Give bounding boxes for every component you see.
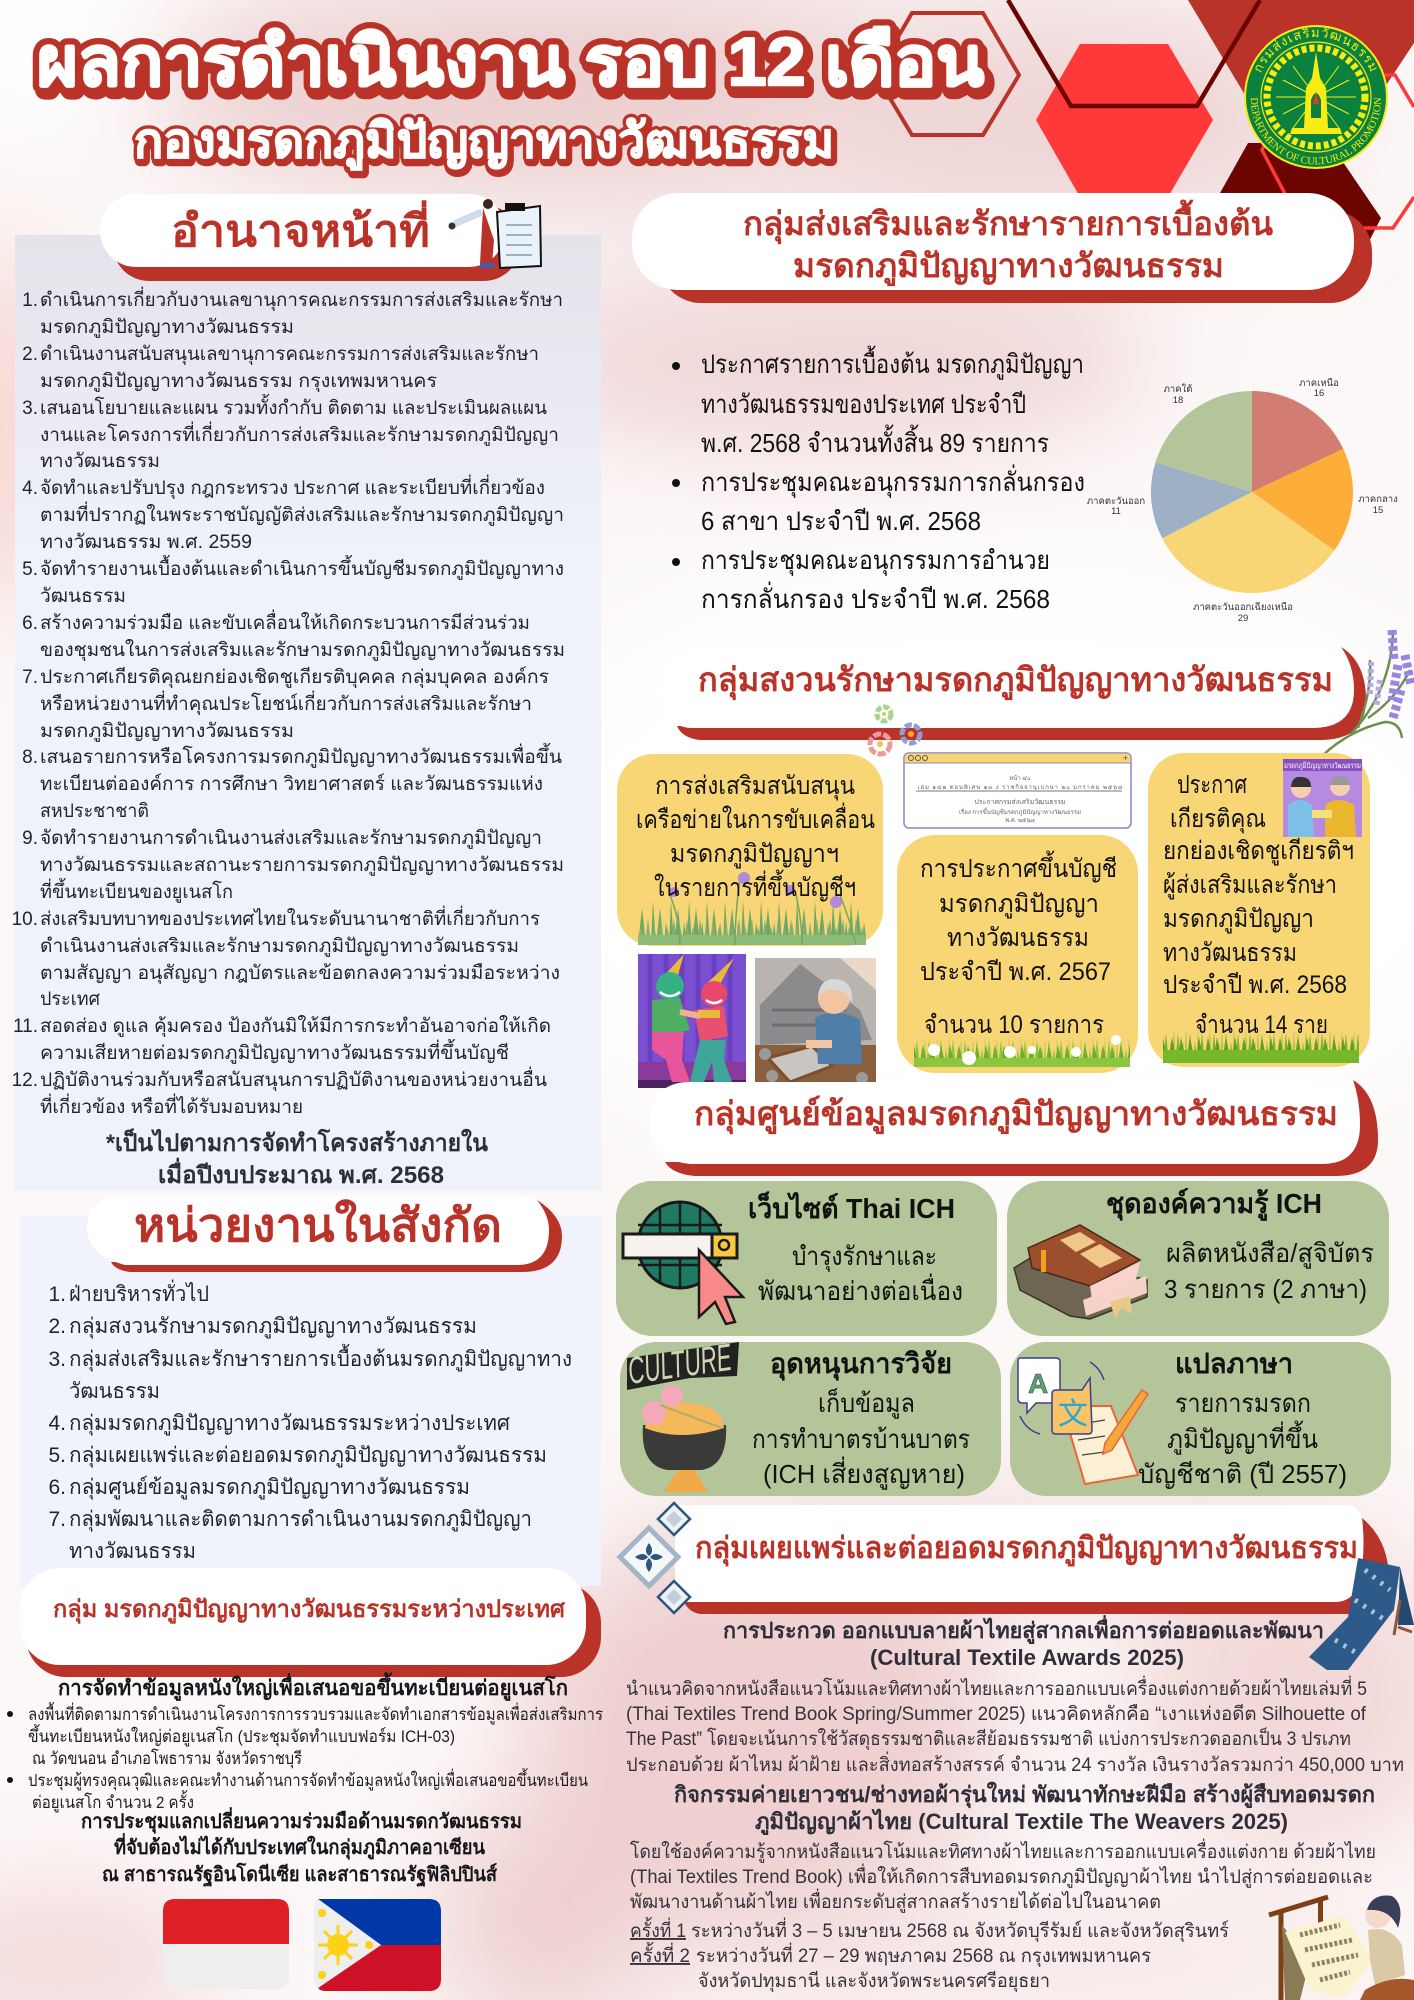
heading: units <box>87 1196 562 1272</box>
pie chart by region: ภาคตะวันออกเฉียงเหนือ <box>1193 601 1293 613</box>
card: Thai ICH website: บำรุงรักษาและ <box>792 1241 937 1272</box>
bullet list: ทางวัฒนธรรมของประเทศ ประจำปี <box>701 389 1026 419</box>
weavers camp text: ระหว่างวันที่ 27 – 29 พฤษภาคม 2568 ณ กรุงเทพมหานคร <box>696 1942 1151 1968</box>
pie chart by region: ภาคใต้ <box>1164 383 1192 395</box>
duties list: ส่งเสริมบทบาทของประเทศไทยในระดับนานาชาติที่เกี่ยวกับการ <box>40 905 540 930</box>
pie chart by region: ภาคกลาง <box>1358 494 1398 505</box>
card: network support: ในรายการที่ขึ้นบัญชีฯ <box>654 869 856 902</box>
card: inventory announcement <box>897 835 1138 1073</box>
card: research support: อุดหนุนการวิจัย <box>770 1348 952 1381</box>
weavers camp text: กิจกรรมค่ายเยาวชน/ช่างทอผ้ารุ่นใหม่ พัฒนาทักษะฝีมือ สร้างผู้สืบทอดมรดก <box>674 1781 1375 1809</box>
pie chart by region: 16 <box>1314 388 1324 399</box>
bullet list: พ.ศ. 2568 จำนวนทั้งสิ้น 89 รายการ <box>701 424 1049 458</box>
card: research support: (ICH เสี่ยงสูญหาย) <box>763 1456 965 1490</box>
bullet list: การประชุมคณะอนุกรรมการกลั่นกรอง <box>701 464 1085 498</box>
weavers camp text: จังหวัดปทุมธานี และจังหวัดพระนครศรีอยุธยา <box>698 1970 1050 1993</box>
duties list: ตามสัญญา อนุสัญญา กฎบัตรและข้อตกลงความร่วมมือระหว่าง <box>40 963 560 985</box>
units list: ทางวัฒนธรรม <box>69 1540 196 1563</box>
image: gazette document window: + <box>1123 753 1128 763</box>
panel: international group <box>7 1568 603 1991</box>
units list: 1. <box>48 1283 66 1306</box>
units list: กลุ่มศูนย์ข้อมูลมรดกภูมิปัญญาทางวัฒนธรรม <box>69 1475 470 1500</box>
subtitle: กองมรดกภูมิปัญญาทางวัฒนธรรม <box>136 118 836 174</box>
duties list: มรดกภูมิปัญญาทางวัฒนธรรม <box>40 721 294 742</box>
duties list: 2. <box>22 344 38 365</box>
card: honouring persons: มรดกภูมิปัญญา <box>1163 905 1314 934</box>
units list: วัฒนธรรม <box>69 1380 160 1403</box>
card: ICH knowledge set: 3 รายการ (2 ภาษา) <box>1164 1274 1367 1304</box>
image: silversmith artisan <box>755 958 876 1084</box>
title: ผลการดำเนินงาน รอบ 12 เดือน <box>40 29 987 105</box>
units list: 2. <box>48 1315 66 1338</box>
card: translation: ภูมิปัญญาที่ขึ้น <box>1167 1420 1318 1455</box>
icon: weaver woman <box>1269 1896 1414 2000</box>
weavers camp text: โดยใช้องค์ความรู้จากหนังสือแนวโน้มและทิศทางผ้าไทยและการออกแบบเครื่องแต่งกาย ด้วยผ้าไทย <box>630 1838 1376 1863</box>
heading: information centre <box>650 1080 1378 1176</box>
international activities text: ขึ้นทะเบียนหนังใหญ่ต่อยูเนสโก (ประชุมจัดทำแบบฟอร์ม ICH-03) <box>28 1724 455 1747</box>
duties list: ที่เกี่ยวข้อง หรือที่ได้รับมอบหมาย <box>40 1093 303 1118</box>
units list: กลุ่มสงวนรักษามรดกภูมิปัญญาทางวัฒนธรรม <box>69 1315 477 1339</box>
card: ICH knowledge set <box>1007 1181 1389 1336</box>
duties list: วัฒนธรรม <box>40 586 126 607</box>
icon: Philippines flag <box>314 1899 441 1991</box>
icon: flowers <box>870 707 920 754</box>
heading: dissemination: กลุ่มเผยแพร่และต่อยอดมรดกภูมิปัญญาทางวัฒนธรรม <box>695 1532 1358 1567</box>
card: honouring persons: จำนวน 14 ราย <box>1195 1011 1328 1039</box>
icon: culture banner <box>625 1337 739 1393</box>
logo: Department of Cultural Promotion seal: กรมส่งเสริมวัฒนธรรม <box>1256 28 1377 72</box>
duties list: ทางวัฒนธรรม พ.ศ. 2559 <box>40 532 252 553</box>
duties list: ทางวัฒนธรรมและสถานะรายการมรดกภูมิปัญญาทางวัฒนธรรม <box>40 855 564 876</box>
bullet list: 6 สาขา ประจำปี พ.ศ. 2568 <box>701 506 981 536</box>
card: network support: เครือข่ายในการขับเคลื่อน <box>636 802 875 834</box>
card: inventory announcement: ทางวัฒนธรรม <box>947 924 1089 952</box>
card: Thai ICH website <box>616 1181 997 1336</box>
textile awards text: The Past” โดยจะเน้นการใช้วัสดุธรรมชาติและสีย้อมธรรมชาติ แบ่งการประกวดออกเป็น 3 ปรเภท <box>626 1726 1351 1751</box>
units list: กลุ่มเผยแพร่และต่อยอดมรดกภูมิปัญญาทางวัฒนธรรม <box>69 1444 547 1468</box>
international activities text: ประชุมผู้ทรงคุณวุฒิและคณะทำงานด้านการจัดทำข้อมูลหนังใหญ่เพื่อเสนอขอขึ้นทะเบียน <box>28 1768 588 1791</box>
international activities text: การประชุมแลกเปลี่ยนความร่วมมือด้านมรดกวัฒนธรรม <box>81 1806 522 1834</box>
image: gazette document window: ประกาศกรมส่งเสริมวัฒนธรรม <box>974 798 1066 806</box>
units list: 6. <box>48 1476 66 1499</box>
title: ผลการดำเนินงาน รอบ 12 เดือน <box>37 24 984 100</box>
duties list: ปฏิบัติงานร่วมกับหรือสนับสนุนการปฏิบัติงานของหน่วยงานอื่น <box>40 1066 547 1092</box>
card: translation: รายการมรดก <box>1175 1388 1311 1418</box>
image: gazette document window: พ.ศ. ๒๕๖๗ <box>1005 817 1035 824</box>
note: เมื่อปีงบประมาณ พ.ศ. 2568 <box>158 1157 444 1189</box>
decorative hexagons top right <box>876 0 1414 255</box>
heading: dissemination <box>675 1505 1389 1614</box>
international activities text: ลงพื้นที่ติดตามการดำเนินงานโครงการการรวบรวมและจัดทำเอกสารข้อมูลเพื่อส่งเสริมการ <box>28 1702 603 1725</box>
heading: safeguarding: กลุ่มสงวนรักษามรดกภูมิปัญญาทางวัฒนธรรม <box>698 661 1333 701</box>
duties list: 4. <box>22 478 38 499</box>
duties list: ทางวัฒนธรรม <box>40 451 160 472</box>
panel: safeguarding <box>617 630 1411 1088</box>
units list <box>48 1279 572 1563</box>
card: honouring persons: ทางวัฒนธรรม <box>1163 939 1297 967</box>
card: honouring persons: ผู้ส่งเสริมและรักษา <box>1163 871 1337 900</box>
duties list: 6. <box>22 613 38 634</box>
pie chart by region: ภาคตะวันออก <box>1087 496 1145 507</box>
panel: preliminary inventory <box>632 193 1398 624</box>
duties list: มรดกภูมิปัญญาทางวัฒนธรรม กรุงเทพมหานคร <box>40 371 437 393</box>
weavers camp text: (Thai Textiles Trend Book) เพื่อให้เกิดการสืบทอดมรดกภูมิปัญญาผ้าไทย นำไปสู่การต่อยอดและ <box>630 1863 1373 1888</box>
textile awards text <box>626 1614 1404 1776</box>
duties list: ประกาศเกียรติคุณยกย่องเชิดชูเกียรติบุคคล กลุ่มบุคคล องค์กร <box>40 666 549 689</box>
card: honouring persons: ยกย่องเชิดชูเกียรติฯ <box>1163 837 1354 866</box>
duties list: งานและโครงการที่เกี่ยวกับการส่งเสริมและรักษามรดกภูมิปัญญา <box>40 421 559 446</box>
logo: Department of Cultural Promotion seal <box>1244 25 1388 169</box>
textile awards text: นำแนวคิดจากหนังสือแนวโน้มและทิศทางผ้าไทยและการออกแบบเครื่องแต่งกายด้วยผ้าไทยเล่มที่ 5 <box>626 1675 1367 1700</box>
title: ผลการดำเนินงาน รอบ 12 เดือน <box>37 24 984 100</box>
international activities text: ต่อยูเนสโก จำนวน 2 ครั้ง <box>32 1790 194 1813</box>
image: gazette document window: เล่ม ๑๔๒ ตอนพิเศษ ๑๓ ง ราชกิจจานุเบกษา ๒๐ มกราคม ๒๕๖๘ <box>918 784 1123 791</box>
duties list: สหประชาชาติ <box>40 801 149 822</box>
textile awards text: (Thai Textiles Trend Book Spring/Summer 2025) แนวคิดหลักคือ “เงาแห่งอดีต Silhouette of <box>626 1703 1367 1725</box>
card: honouring persons: ประจำปี พ.ศ. 2568 <box>1163 971 1347 999</box>
international activities text <box>7 1672 603 1888</box>
card: translation <box>1010 1342 1391 1496</box>
duties list: สอดส่อง ดูแล คุ้มครอง ป้องกันมิให้มีการกระทำอันอาจก่อให้เกิด <box>40 1015 551 1038</box>
duties list: ของชุมชนในการส่งเสริมและรักษามรดกภูมิปัญญาทางวัฒนธรรม <box>40 639 565 662</box>
duties list: 8. <box>22 747 38 768</box>
duties list: 5. <box>22 559 38 580</box>
image: gazette document window <box>904 753 1131 828</box>
panel: units <box>20 1196 601 1586</box>
duties list: 3. <box>22 398 38 419</box>
textile awards text: ประกอบด้วย ผ้าไหม ผ้าฝ้าย และสิ่งทอสร้างสรรค์ จำนวน 24 รางวัล เงินรางวัลรวมกว่า 450,000 บาท <box>626 1751 1404 1776</box>
duties list: เสนอนโยบายและแผน รวมทั้งกำกับ ติดตาม และประเมินผลแผน <box>40 394 547 419</box>
icon: translation bubbles and pen: A <box>1028 1368 1048 1399</box>
pie chart by region: 29 <box>1238 613 1248 624</box>
heading: safeguarding <box>660 645 1366 740</box>
duties list <box>12 286 565 1118</box>
image: award ceremony <box>1283 759 1362 837</box>
card: ICH knowledge set: ผลิตหนังสือ/สูจิบัตร <box>1166 1238 1374 1269</box>
heading: duties: อำนาจหน้าที่ <box>171 200 430 256</box>
subtitle: กองมรดกภูมิปัญญาทางวัฒนธรรม <box>134 115 834 171</box>
logo: Department of Cultural Promotion seal: DEPARTMENT OF CULTURAL PROMOTION <box>1250 98 1382 164</box>
weavers camp text: ภูมิปัญญาผ้าไทย (Cultural Textile The Weavers 2025) <box>755 1808 1288 1836</box>
card: Thai ICH website: พัฒนาอย่างต่อเนื่อง <box>758 1273 963 1306</box>
pie chart by region: 18 <box>1173 395 1183 406</box>
icon: blue fabric <box>1309 1558 1414 1670</box>
units list: กลุ่มพัฒนาและติดตามการดำเนินงานมรดกภูมิปัญญา <box>69 1508 532 1532</box>
heading: preliminary inventory: มรดกภูมิปัญญาทางวัฒนธรรม <box>793 247 1224 287</box>
card: honouring persons <box>1148 753 1370 1067</box>
panel: duties <box>12 194 601 1191</box>
note <box>106 1128 489 1189</box>
icon: globe search cursor <box>623 1202 743 1324</box>
card: research support: เก็บข้อมูล <box>818 1387 915 1419</box>
image: gazette document window: เรื่อง การขึ้นบัญชีมรดกภูมิปัญญาทางวัฒนธรรม <box>959 806 1081 816</box>
icon: lavender <box>1323 630 1411 755</box>
weavers camp text: พัฒนางานด้านผ้าไทย เพื่อยกระดับสู่สากลสร้างรายได้ต่อไปในอนาคต <box>630 1888 1161 1913</box>
heading: international group <box>20 1568 601 1677</box>
heading: information centre: กลุ่มศูนย์ข้อมูลมรดกภูมิปัญญาทางวัฒนธรรม <box>694 1095 1338 1135</box>
duties list: 1. <box>22 290 38 311</box>
heading: duties <box>100 194 520 281</box>
weavers camp text: ครั้งที่ 2 <box>630 1942 690 1967</box>
duties list: 10. <box>12 909 38 930</box>
units list: 3. <box>48 1348 66 1371</box>
heading: preliminary inventory <box>632 193 1372 303</box>
duties list: ความเสียหายต่อมรดกภูมิปัญญาทางวัฒนธรรมที่ขึ้นบัญชี <box>40 1039 509 1064</box>
pie chart by region: 11 <box>1111 506 1121 517</box>
card: research support <box>620 1337 1001 1496</box>
duties list: ดำเนินการเกี่ยวกับงานเลขานุการคณะกรรมการส่งเสริมและรักษา <box>40 286 563 312</box>
international activities text: การจัดทำข้อมูลหนังใหญ่เพื่อเสนอขอขึ้นทะเบียนต่อยูเนสโก <box>58 1672 568 1702</box>
card: inventory announcement: การประกาศขึ้นบัญชี <box>920 850 1117 883</box>
heading: units: หน่วยงานในสังกัด <box>134 1198 502 1251</box>
units list: 5. <box>48 1444 66 1467</box>
note: *เป็นไปตามการจัดทำโครงสร้างภายใน <box>106 1128 489 1157</box>
duties list: ตามที่ปรากฏในพระราชบัญญัติส่งเสริมและรักษามรดกภูมิปัญญา <box>40 501 564 526</box>
card: network support <box>617 754 883 946</box>
units list: 4. <box>48 1412 66 1435</box>
international activities text: ที่จับต้องไม่ได้กับประเทศในกลุ่มภูมิภาคอาเซียน <box>114 1832 485 1861</box>
units list: กลุ่มมรดกภูมิปัญญาทางวัฒนธรรมระหว่างประเทศ <box>69 1412 511 1436</box>
duties list: เสนอรายการหรือโครงการมรดกภูมิปัญญาทางวัฒนธรรมเพื่อขึ้น <box>40 743 562 768</box>
card: network support: มรดกภูมิปัญญาฯ <box>670 840 839 869</box>
card: inventory announcement: มรดกภูมิปัญญา <box>939 890 1099 919</box>
weavers camp text: ระหว่างวันที่ 3 – 5 เมษายน 2568 ณ จังหวัดบุรีรัมย์ และจังหวัดสุรินทร์ <box>691 1917 1229 1943</box>
units list: 7. <box>48 1508 66 1531</box>
card: ICH knowledge set: ชุดองค์ความรู้ ICH <box>1106 1188 1322 1221</box>
card: network support: การส่งเสริมสนับสนุน <box>655 772 855 801</box>
bullet list: การประชุมคณะอนุกรรมการอำนวย <box>701 545 1050 576</box>
card: research support: การทำบาตรบ้านบาตร <box>752 1424 970 1454</box>
icon: translation bubbles and pen: 文 <box>1058 1389 1088 1433</box>
pie chart by region: 15 <box>1373 505 1383 516</box>
heading: preliminary inventory: กลุ่มส่งเสริมและรักษารายการเบื้องต้น <box>743 199 1273 245</box>
bullet list: การกลั่นกรอง ประจำปี พ.ศ. 2568 <box>701 581 1050 614</box>
duties list: มรดกภูมิปัญญาทางวัฒนธรรม <box>40 317 294 338</box>
international activities text: ณ วัดขนอน อำเภอโพธาราม จังหวัดราชบุรี <box>32 1748 302 1769</box>
icon: Thai diamond ornaments <box>620 1503 690 1613</box>
card: inventory announcement: ประจำปี พ.ศ. 2567 <box>920 958 1111 986</box>
image: khon performers <box>638 954 746 1088</box>
bullet list: ประกาศรายการเบื้องต้น มรดกภูมิปัญญา <box>701 345 1084 380</box>
card: honouring persons: ประกาศ <box>1177 771 1247 799</box>
duties list: จัดทำและปรับปรุง กฎกระทรวง ประกาศ และระเบียบที่เกี่ยวข้อง <box>40 474 545 500</box>
duties list: หรือหน่วยงานที่ทำคุณประโยชน์เกี่ยวกับการส่งเสริมและรักษา <box>40 690 532 716</box>
duties list: ดำเนินงานสนับสนุนเลขานุการคณะกรรมการส่งเสริมและรักษา <box>40 344 539 366</box>
card: Thai ICH website: เว็บไซต์ Thai ICH <box>748 1191 955 1224</box>
icon: stacked books <box>1014 1225 1147 1319</box>
duties list: ดำเนินงานส่งเสริมและรักษามรดกภูมิปัญญาทางวัฒนธรรม <box>40 936 519 957</box>
duties list: ทะเบียนต่อองค์การ การศึกษา วิทยาศาสตร์ และวัฒนธรรมแห่ง <box>40 773 543 795</box>
duties list: 11. <box>13 1016 38 1037</box>
card: translation: บัญชีชาติ (ปี 2557) <box>1138 1459 1347 1489</box>
duties list: สร้างความร่วมมือ และขับเคลื่อนให้เกิดกระบวนการมีส่วนร่วม <box>40 609 530 634</box>
units list: ฝ่ายบริหารทั่วไป <box>69 1279 209 1306</box>
weavers camp text <box>630 1781 1376 1993</box>
image: award ceremony: มรดกภูมิปัญญาทางวัฒนธรรม <box>1284 761 1361 770</box>
international activities text: ณ สาธารณรัฐอินโดนีเซีย และสาธารณรัฐฟิลิปปินส์ <box>102 1862 498 1888</box>
units list: กลุ่มส่งเสริมและรักษารายการเบื้องต้นมรดกภูมิปัญญาทาง <box>69 1344 572 1372</box>
icon: monk alms bowl with lotus <box>642 1385 726 1492</box>
duties list: 9. <box>22 828 38 849</box>
textile awards text: (Cultural Textile Awards 2025) <box>870 1645 1184 1670</box>
duties list: จัดทำรายงานการดำเนินงานส่งเสริมและรักษามรดกภูมิปัญญา <box>40 828 542 849</box>
card: inventory announcement: จำนวน 10 รายการ <box>924 1011 1104 1039</box>
icon: culture banner: CULTURE <box>625 1337 735 1393</box>
panel: dissemination <box>620 1503 1414 2000</box>
pie chart by region <box>1087 378 1398 624</box>
duties list: ที่ขึ้นทะเบียนของยูเนสโก <box>40 878 233 903</box>
subtitle: กองมรดกภูมิปัญญาทางวัฒนธรรม <box>134 115 834 171</box>
card: translation: แปลภาษา <box>1175 1348 1293 1379</box>
pie chart by region: ภาคเหนือ <box>1299 378 1339 389</box>
textile awards text: การประกวด ออกแบบลายผ้าไทยสู่สากลเพื่อการต่อยอดและพัฒนา <box>723 1614 1324 1645</box>
icon: Indonesia flag <box>163 1899 289 1989</box>
duties list: 7. <box>22 667 38 688</box>
duties list: ประเทศ <box>40 989 100 1010</box>
weavers camp text: ครั้งที่ 1 <box>630 1917 686 1942</box>
duties list: 12. <box>12 1070 38 1091</box>
icon: translation bubbles and pen <box>1018 1358 1148 1484</box>
icon: person with clipboard <box>448 199 541 268</box>
heading: international group: กลุ่ม มรดกภูมิปัญญาทางวัฒนธรรมระหว่างประเทศ <box>53 1596 566 1625</box>
bullet list <box>672 345 1085 614</box>
panel: information centre <box>616 1080 1391 1496</box>
card: honouring persons: เกียรติคุณ <box>1170 805 1266 834</box>
image: gazette document window: หน้า ๔๐ <box>1009 775 1031 782</box>
duties list: จัดทำรายงานเบื้องต้นและดำเนินการขึ้นบัญชีมรดกภูมิปัญญาทาง <box>40 555 564 580</box>
